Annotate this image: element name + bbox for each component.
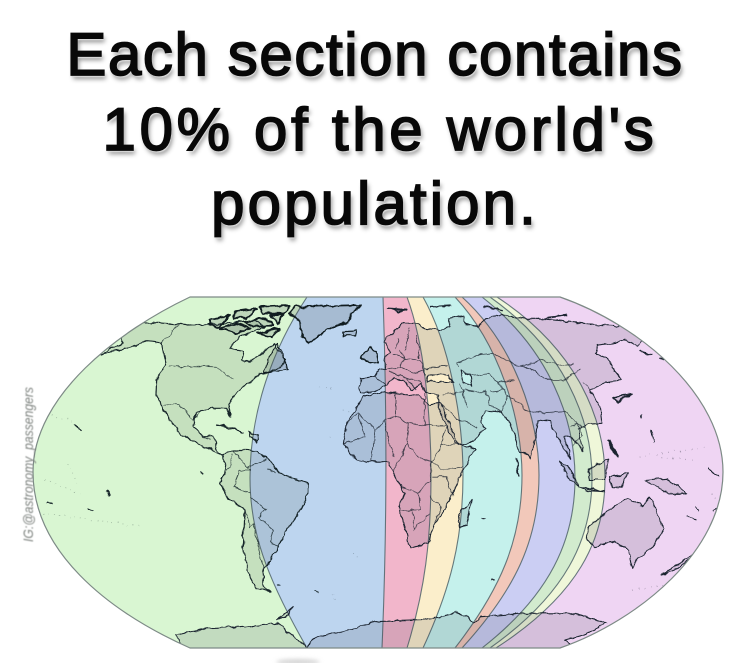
australia — [587, 497, 663, 567]
labrador — [263, 343, 287, 373]
new guinea and sulawesi — [610, 473, 687, 493]
pacific islands east — [642, 413, 718, 520]
faint mark at bottom edge — [276, 659, 320, 663]
greenland — [289, 305, 362, 343]
section 2: Atlantic — [250, 297, 386, 648]
section 10: east Asia and Oceania — [498, 298, 722, 648]
south america — [220, 450, 308, 592]
title — [66, 21, 685, 244]
java — [579, 487, 605, 492]
canadian arctic islands — [210, 305, 290, 337]
new zealand — [662, 553, 697, 575]
sumatra — [560, 462, 579, 486]
landmasses — [43, 305, 718, 655]
asian borders — [442, 353, 590, 445]
madagascar — [458, 500, 472, 527]
section 4: eastern Europe and east Africa — [407, 297, 463, 648]
section boundaries — [250, 297, 605, 648]
borneo — [588, 458, 608, 480]
antarctica — [177, 613, 607, 655]
watermark: IG:@astronomy_passengers — [20, 387, 36, 542]
britain and ireland — [360, 347, 378, 363]
european borders — [375, 328, 447, 392]
title: Each section contains — [66, 21, 684, 88]
philippines — [608, 440, 618, 457]
caribbean islands — [217, 424, 258, 443]
north america — [80, 320, 285, 455]
title: population. — [211, 170, 539, 237]
africa and oceania — [177, 352, 718, 655]
antarctic peninsula — [277, 607, 293, 620]
american borders — [162, 325, 280, 570]
eurasia with black and caspian seas — [360, 315, 643, 460]
eurasia and nearby — [360, 306, 643, 460]
title: 10% of the world's — [102, 96, 657, 163]
population sections — [0, 297, 750, 648]
african borders — [343, 393, 462, 530]
section 8: southeast Asia — [482, 297, 592, 648]
section 9: eastern China — [490, 297, 605, 648]
pacific islands — [47, 424, 318, 592]
africa — [343, 392, 475, 548]
arctic russian islands — [388, 306, 567, 318]
section 7: India east — [462, 297, 575, 648]
section 5: Middle East and Indian Ocean — [423, 297, 522, 648]
section 1: Americas and Pacific — [34, 298, 306, 648]
americas — [43, 320, 358, 600]
iceland — [342, 331, 357, 336]
arctic canada, greenland, iceland, britain — [210, 305, 378, 373]
indian ocean islands — [482, 457, 518, 581]
section 6: India west — [455, 297, 539, 648]
section 3: western Europe and Africa — [382, 297, 431, 648]
map outline — [33, 297, 723, 648]
japan and kuriles — [613, 352, 672, 402]
world map — [22, 296, 724, 663]
